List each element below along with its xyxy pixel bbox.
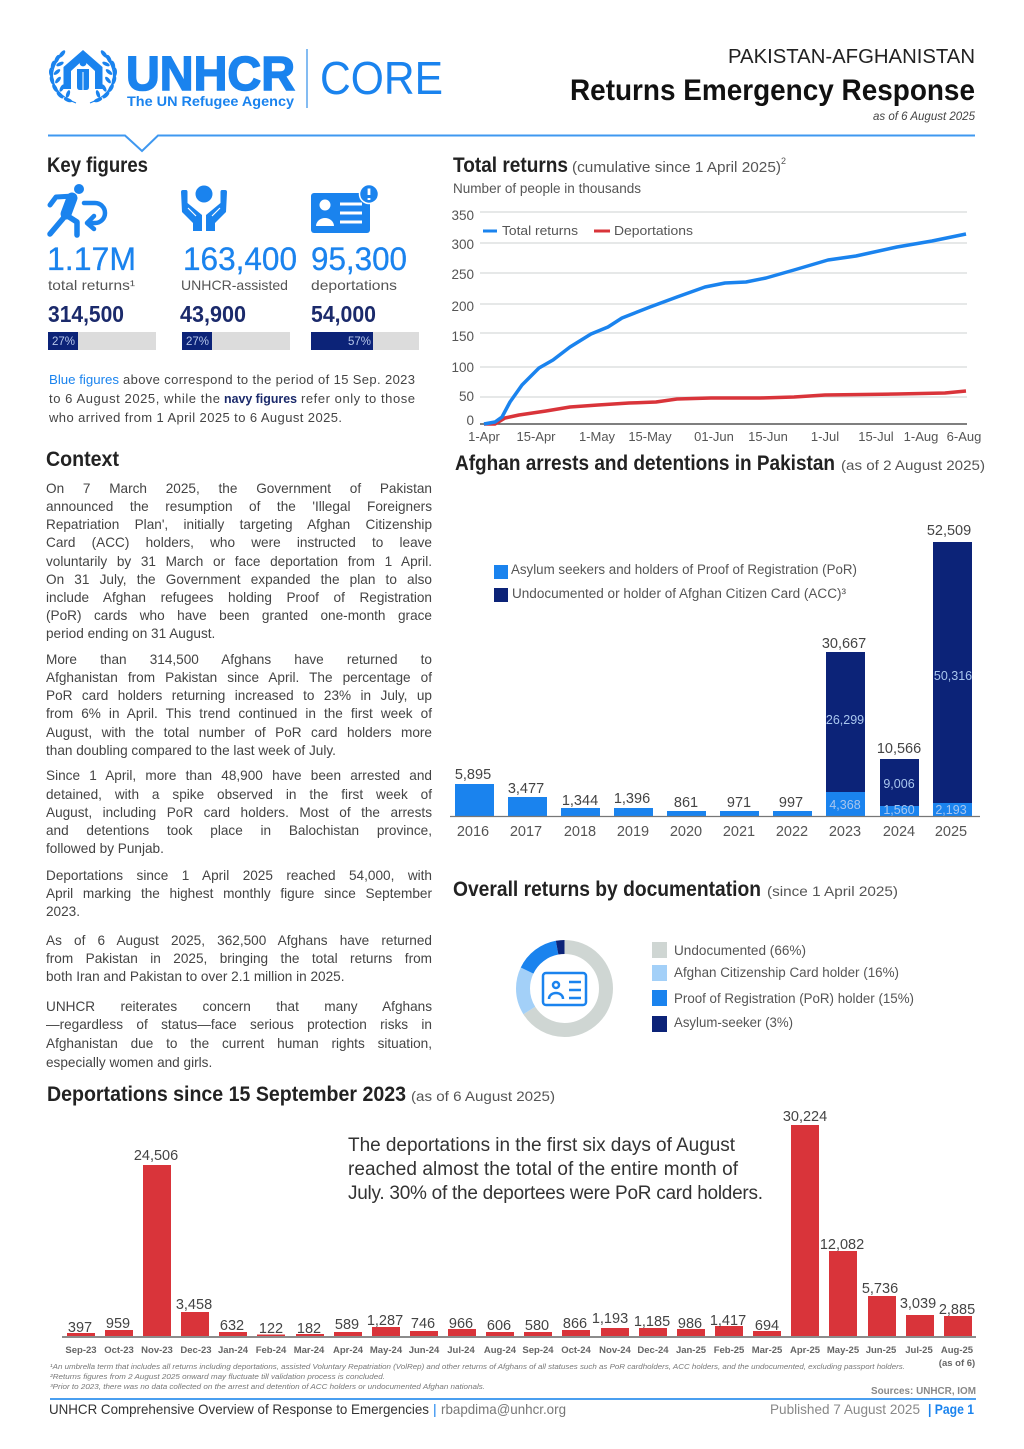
x axis labels: 15-Jun [748, 429, 788, 444]
bar values: 866 [563, 1316, 587, 1332]
bar values: 3,458 [176, 1297, 212, 1313]
month labels: Mar-24 [294, 1345, 325, 1356]
bar values: 122 [259, 1321, 283, 1337]
heading: total returns [453, 154, 786, 196]
icon: returning runner [50, 184, 105, 235]
month labels: Aug-24 [484, 1345, 517, 1356]
stat: deportations: deportations [311, 277, 397, 293]
x axis labels [468, 429, 981, 444]
month labels: Sep-24 [522, 1345, 554, 1356]
month labels [65, 1345, 975, 1369]
month labels: Apr-25 [790, 1345, 821, 1356]
header: UNHCR CORE logo [49, 48, 443, 109]
bar segment values: 50,316 [934, 669, 972, 683]
text: figures note: navy figures [224, 391, 297, 406]
month labels: Oct-24 [561, 1345, 591, 1356]
callout: July. 30% of the deportees were PoR card holders. [348, 1183, 763, 1204]
text: figures note: to 6 August 2025, while the [49, 391, 220, 406]
heading: documentation: (since 1 April 2025) [767, 883, 898, 899]
year labels: 2024 [883, 824, 915, 840]
text block: context: announced the resumption of the 'Illegal Foreigners [46, 499, 432, 514]
x axis labels: 1-May [579, 429, 616, 444]
footnotes: ³Prior to 2023, there was no data collected on the arrest and detention of ACC holders or undocumented Afghan nationals. [50, 1382, 485, 1391]
text block: context: and detentions took place in Balochistan province, [46, 823, 432, 838]
text block: context: (PoR) cards who have been granted one-month grace [46, 608, 432, 623]
bar values: 2,885 [939, 1302, 975, 1318]
text block: context: —regardless of status—face serious protection risks in [46, 1017, 432, 1032]
legend [483, 223, 694, 238]
x axis labels: 1-Jul [811, 429, 839, 444]
heading: total returns: Total returns [453, 154, 568, 177]
text block: context: Deportations since 1 April 2025 reached 54,000, with [46, 868, 432, 883]
stat: total returns: total returns¹ [48, 277, 135, 293]
icon: UNHCR emblem [49, 49, 117, 103]
heading: deportations: Deportations since 15 September 2023 [47, 1083, 406, 1106]
stat: deportations: 54,000 [311, 301, 376, 327]
header: report title: Returns Emergency Response [570, 74, 975, 107]
text block: context: Card (ACC) holders, who were instructed to leave [46, 535, 432, 550]
y axis labels: 200 [451, 299, 474, 314]
footnotes: ²Returns figures from 2 August 2025 onward may fluctuate till validation process is concluded. [50, 1372, 385, 1381]
bar values: 746 [411, 1316, 435, 1332]
stat: UNHCR-assisted: UNHCR-assisted [181, 277, 288, 293]
stat: UNHCR-assisted: 163,400 [183, 241, 297, 277]
footer [49, 1401, 974, 1417]
y axis labels: 150 [451, 329, 474, 344]
text block: context: period ending on 31 August. [46, 626, 215, 641]
month labels: Feb-25 [714, 1345, 745, 1356]
text block: context: from 6% in April. This trend continued in the first week of [46, 706, 432, 721]
text block: context: Afghanistan from Pakistan since April. The percentage of [46, 670, 432, 685]
month labels: Jun-24 [409, 1345, 440, 1356]
heading: context: Context [46, 448, 119, 471]
text: figures note: refer only to those [301, 391, 415, 406]
year labels [457, 824, 967, 840]
month labels: (as of 6) [939, 1358, 975, 1369]
header: report title [570, 46, 975, 123]
bar values: 182 [297, 1321, 321, 1337]
bar values: 1,417 [710, 1313, 746, 1329]
heading: arrests: Afghan arrests and detentions in Pakistan [455, 452, 835, 475]
year labels: 2023 [829, 824, 861, 840]
month labels: Aug-25 [941, 1345, 974, 1356]
month labels: Jan-25 [676, 1345, 707, 1356]
text block: context: PoR card holders returning increased to 23% in July, up [46, 688, 432, 703]
footer: | Page 1 [928, 1401, 974, 1417]
legend [652, 942, 914, 1032]
text block: context: August, with the total number of PoR card holders more [46, 725, 432, 740]
icon: ID card with alert [311, 184, 378, 233]
x axis labels: 6-Aug [947, 429, 981, 444]
month labels: Apr-24 [333, 1345, 364, 1356]
bar totals [455, 523, 971, 811]
legend: Asylum seekers and holders of Proof of Registration (PoR) [511, 562, 857, 577]
heading: total returns: 2 [781, 156, 786, 166]
stat: total returns: 314,500 [48, 301, 124, 327]
month labels: Dec-24 [637, 1345, 669, 1356]
bar values: 1,287 [367, 1313, 403, 1329]
line: deportations [484, 391, 966, 424]
legend [494, 562, 857, 602]
stat: deportations [311, 241, 419, 350]
legend: Proof of Registration (PoR) holder (15%) [674, 991, 914, 1006]
bar totals: 5,895 [455, 767, 491, 783]
legend: Asylum-seeker (3%) [674, 1015, 793, 1030]
bar totals: 971 [727, 795, 751, 811]
y axis labels: 300 [451, 237, 474, 252]
callout: reached almost the total of the entire month of [348, 1159, 739, 1180]
x axis labels: 15-May [628, 429, 672, 444]
footnotes [50, 1362, 905, 1391]
month labels: Oct-23 [104, 1345, 134, 1356]
bars [455, 542, 972, 816]
callout: The deportations in the first six days of August [348, 1135, 736, 1156]
x axis labels: 01-Jun [694, 429, 734, 444]
year labels: 2018 [564, 824, 596, 840]
bar values: 397 [68, 1320, 92, 1336]
bar values: 24,506 [134, 1148, 178, 1164]
bar segment values: 4,368 [829, 798, 861, 812]
stat: UNHCR-assisted: 27% [186, 336, 209, 348]
wordmark: UNHCR: UNHCR [126, 48, 295, 101]
year labels: 2019 [617, 824, 649, 840]
tagline: The UN Refugee Agency [127, 93, 294, 109]
y axis labels: 250 [451, 267, 474, 282]
panel: total returns line chart [451, 154, 981, 444]
bar totals: 1,344 [562, 793, 598, 809]
text block: context: especially women and girls. [46, 1055, 212, 1070]
heading: total returns: Number of people in thousands [453, 181, 641, 196]
bar segment values: 2,193 [935, 803, 967, 817]
text block: context: detained, with a spike observed in the first week of [46, 786, 432, 802]
text block: context: More than 314,500 Afghans have returned to [46, 652, 432, 667]
year labels: 2016 [457, 824, 489, 840]
legend: Undocumented (66%) [674, 943, 806, 958]
text block: context: both Iran and Pakistan to over 2.1 million in 2025. [46, 969, 344, 984]
bar values: 12,082 [820, 1237, 864, 1253]
bar values: 580 [525, 1318, 549, 1334]
year labels: 2021 [723, 824, 755, 840]
bar totals: 30,667 [822, 636, 866, 652]
wordmark: CORE: CORE [320, 52, 443, 104]
stat: total returns: 1.17M [47, 241, 136, 277]
text block: context: On 31 July, the Government expanded the plan to also [46, 572, 432, 587]
text block: context: than doubling compared to the last week of July. [46, 743, 336, 758]
year labels: 2025 [935, 824, 967, 840]
footer: rbapdima@unhcr.org [441, 1401, 566, 1417]
stat: total returns: 27% [52, 336, 75, 348]
bar values: 1,185 [634, 1314, 670, 1330]
text block: context: Afghanistan due to the current human rights situation, [46, 1036, 432, 1051]
bar segment values: 1,560 [883, 803, 915, 817]
text block: context: from Pakistan in 2025, bringing the total returns from [46, 951, 432, 966]
month labels: Jun-25 [866, 1345, 897, 1356]
bar values: 966 [449, 1316, 473, 1332]
text: figures note: who arrived from 1 April 2025 to 6 August 2025. [48, 410, 342, 425]
text block: context: followed by Punjab. [46, 841, 164, 856]
x axis labels: 15-Jul [858, 429, 894, 444]
heading: documentation: Overall returns by documentation [453, 878, 761, 901]
y axis labels [451, 208, 474, 428]
icon: ID card [543, 973, 586, 1005]
legend: Total returns [502, 223, 579, 238]
heading: deportations: (as of 6 August 2025) [411, 1088, 555, 1104]
text block: context: On 7 March 2025, the Government of Pakistan [46, 481, 432, 496]
text block: context: Repatriation Plan', initially targeting Afghan Citizenship [46, 517, 432, 532]
month labels: Jul-25 [905, 1345, 933, 1356]
footer: | [433, 1401, 437, 1417]
bar segment values: 26,299 [826, 713, 864, 727]
panel: returns by documentation [453, 878, 914, 1032]
month labels: Mar-25 [752, 1345, 783, 1356]
source: Sources: UNHCR, IOM [871, 1386, 976, 1397]
y axis labels: 350 [451, 208, 474, 223]
text block: context: Since 1 April, more than 48,900 have been arrested and [46, 768, 432, 783]
text: figures note [48, 372, 415, 425]
year labels: 2020 [670, 824, 702, 840]
stat: deportations: 95,300 [311, 241, 407, 277]
month labels: Dec-23 [180, 1345, 212, 1356]
bar totals: 52,509 [927, 523, 971, 539]
footer: Published 7 August 2025 [770, 1401, 920, 1417]
donut chart [523, 947, 606, 1030]
text block: context: include Afghan refugees holding Proof of Registration [46, 590, 432, 605]
year labels: 2022 [776, 824, 808, 840]
stat: total returns [47, 241, 156, 350]
stat: deportations: 57% [348, 336, 371, 348]
text block: context: April marking the highest monthly figure since September [46, 886, 432, 901]
bar totals: 10,566 [877, 741, 921, 757]
text: figures note: Blue figures [49, 372, 120, 387]
month labels: Jan-24 [218, 1345, 249, 1356]
bar values: 3,039 [900, 1296, 936, 1312]
text block: context: UNHCR reiterates concern that many Afghans [46, 999, 432, 1014]
bar values: 30,224 [783, 1109, 827, 1125]
stat: UNHCR-assisted: 43,900 [180, 301, 246, 327]
bar totals: 3,477 [508, 781, 544, 797]
bar values [68, 1109, 975, 1337]
month labels: Nov-23 [141, 1345, 173, 1356]
x axis labels: 1-Apr [468, 429, 501, 444]
heading: arrests: (as of 2 August 2025) [841, 457, 985, 473]
panel: key figures [47, 154, 419, 425]
icon: hands protecting person [181, 186, 227, 231]
bar values: 694 [755, 1318, 779, 1334]
bar totals: 861 [674, 795, 698, 811]
bar totals: 1,396 [614, 791, 650, 807]
bar values: 959 [106, 1316, 130, 1332]
bars [67, 1125, 972, 1336]
month labels: Sep-23 [65, 1345, 97, 1356]
bar values: 606 [487, 1318, 511, 1334]
header: report title: PAKISTAN-AFGHANISTAN [728, 46, 975, 68]
legend: Deportations [614, 223, 694, 238]
month labels: Jul-24 [447, 1345, 475, 1356]
y axis labels: 50 [459, 389, 474, 404]
text block: context: As of 6 August 2025, 362,500 Afghans have returned [46, 933, 432, 948]
footnotes: ¹An umbrella term that includes all returns including deportations, assisted Voluntary Repatriation (VolRep) and other returns of Afghans of all statuses such as PoR cardholders, ACC holders, and the undocumented, excluding passport holders. [50, 1362, 905, 1371]
x axis labels: 15-Apr [516, 429, 556, 444]
month labels: Nov-24 [599, 1345, 632, 1356]
bar values: 986 [678, 1316, 702, 1332]
text block: context [46, 481, 432, 1070]
callout [348, 1135, 763, 1204]
year labels: 2017 [510, 824, 542, 840]
header divider with notch [48, 136, 975, 151]
bar values: 632 [220, 1318, 244, 1334]
text block: context: August, including PoR card holders. Most of the arrests [46, 805, 432, 820]
text block: context: 2023. [46, 904, 80, 919]
bar values: 5,736 [862, 1281, 898, 1297]
legend: Undocumented or holder of Afghan Citizen Card (ACC)³ [512, 586, 846, 601]
x axis labels: 1-Aug [904, 429, 938, 444]
bar totals: 997 [779, 795, 803, 811]
panel: Afghan arrests bar chart [450, 452, 985, 840]
y axis labels: 100 [451, 360, 474, 375]
footer: UNHCR Comprehensive Overview of Response to Emergencies [49, 1401, 429, 1417]
month labels: Feb-24 [256, 1345, 287, 1356]
panel: deportations bar chart [47, 1083, 976, 1369]
bar values: 1,193 [592, 1311, 628, 1327]
bar values: 589 [335, 1317, 359, 1333]
text: figures note: above correspond to the period of 15 Sep. 2023 [123, 372, 415, 387]
text block: context: voluntarily by 31 March or face deportation from 1 April. [46, 554, 432, 569]
legend: Afghan Citizenship Card holder (16%) [674, 965, 899, 980]
bar segment values [826, 669, 972, 817]
month labels: May-25 [827, 1345, 860, 1356]
stat: UNHCR-assisted [180, 241, 297, 350]
month labels: May-24 [370, 1345, 403, 1356]
heading: key figures: Key figures [47, 154, 148, 177]
y axis labels: 0 [466, 413, 474, 428]
line: total returns [484, 234, 966, 424]
bar segment values: 9,006 [883, 777, 915, 791]
header: report title: as of 6 August 2025 [873, 109, 975, 123]
heading: total returns: (cumulative since 1 April 2025) [572, 160, 781, 176]
